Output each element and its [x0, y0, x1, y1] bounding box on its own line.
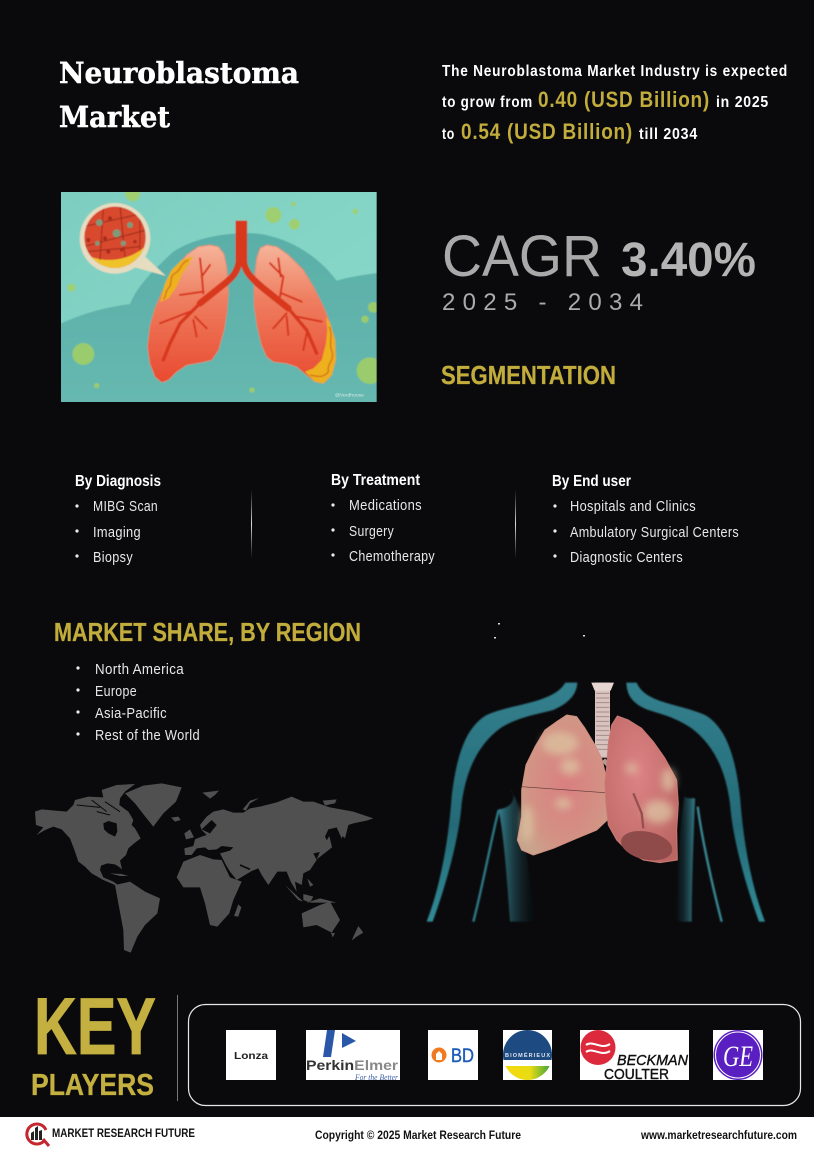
segment column: by diagnosis: Imaging — [93, 524, 141, 541]
left lung — [148, 245, 228, 382]
logo: GE — [713, 1030, 763, 1080]
segment column: by diagnosis: Biopsy — [93, 549, 133, 566]
lung right — [605, 716, 678, 863]
segment column: by treatment: By Treatment — [331, 472, 421, 489]
segment column: by diagnosis — [75, 473, 161, 566]
CAGR: CAGR — [442, 224, 602, 289]
CAGR — [442, 224, 756, 316]
segment column: by treatment: Surgery — [349, 523, 394, 540]
title: Market — [59, 100, 171, 134]
logo: BD: BD — [451, 1046, 474, 1067]
heading: key players: PLAYERS — [31, 1067, 154, 1102]
footer — [0, 1117, 814, 1150]
region list: North America — [95, 661, 184, 678]
logo: PerkinElmer: For the Better — [354, 1073, 399, 1082]
market forecast text: in 2025 — [716, 94, 769, 111]
heading: key players: KEY — [34, 982, 156, 1072]
market forecast text: 0.40 (USD Billion) — [538, 87, 710, 112]
CAGR: 2025 - 2034 — [442, 289, 648, 316]
logo: bioMérieux: BIOMÉRIEUX — [505, 1051, 550, 1059]
icon: MRF logo — [27, 1124, 49, 1146]
logo: Beckman Coulter: BECKMAN — [617, 1052, 688, 1069]
segment column: by diagnosis: By Diagnosis — [75, 473, 161, 490]
market forecast text: 0.54 (USD Billion) — [461, 119, 633, 144]
segment column: by treatment: Chemotherapy — [349, 548, 435, 565]
logo: Beckman Coulter: COULTER — [604, 1066, 669, 1083]
segment column: by diagnosis: MIBG Scan — [93, 498, 158, 515]
CAGR: 3.40% — [621, 234, 756, 287]
segment column: by end user: Hospitals and Clinics — [570, 498, 696, 515]
specks — [494, 623, 585, 638]
logo: PerkinElmer: Perkin Elmer — [306, 1057, 399, 1073]
trachea — [591, 683, 622, 778]
world map — [35, 783, 373, 953]
title — [59, 56, 299, 134]
market forecast text: till 2034 — [639, 126, 698, 143]
footer: MARKET RESEARCH FUTURE — [52, 1126, 195, 1140]
title: Neuroblastoma — [59, 56, 299, 90]
logo: GE: GE — [723, 1040, 753, 1073]
region list: Europe — [95, 683, 137, 700]
right lung — [254, 245, 336, 383]
magnifier with cells — [80, 203, 150, 274]
segment column: by end user: By End user — [552, 473, 631, 490]
heading: key players — [31, 982, 156, 1102]
lung left — [517, 715, 607, 855]
logo: Beckman Coulter — [580, 1030, 689, 1083]
illustration: torso with lungs — [427, 683, 765, 922]
segment column: by end user: Ambulatory Surgical Centers — [570, 524, 739, 541]
panel: key players logos — [188, 1004, 800, 1106]
market forecast text — [442, 63, 788, 144]
market forecast text: to — [442, 126, 455, 143]
logo: PerkinElmer — [306, 1030, 400, 1082]
logo: BD — [428, 1030, 478, 1080]
illustration: lungs on teal background — [61, 192, 377, 402]
market forecast text: to grow from — [442, 94, 533, 111]
logo: Lonza — [226, 1030, 276, 1080]
logo: Lonza: Lonza — [234, 1051, 269, 1062]
footer: Copyright © 2025 Market Research Future — [315, 1128, 521, 1142]
heading: market share by region: MARKET SHARE, BY REGION — [54, 617, 361, 647]
segment column: by end user — [552, 473, 739, 566]
speech pointer — [135, 256, 166, 276]
segment column: by end user: Diagnostic Centers — [570, 549, 683, 566]
body silhouette left — [427, 683, 577, 922]
region list: Asia-Pacific — [95, 705, 167, 722]
logo: bioMérieux — [503, 1030, 552, 1081]
heading: segmentation: SEGMENTATION — [441, 360, 616, 390]
region list: Rest of the World — [95, 727, 200, 744]
tumour patches — [160, 256, 193, 302]
illustration: lungs on teal background: @Verdhouse — [335, 393, 364, 399]
region list — [76, 661, 200, 744]
trachea and bronchi — [160, 221, 322, 360]
segment column: by treatment: Medications — [349, 497, 422, 514]
body silhouette right — [626, 683, 765, 922]
segment column: by treatment — [331, 472, 435, 565]
